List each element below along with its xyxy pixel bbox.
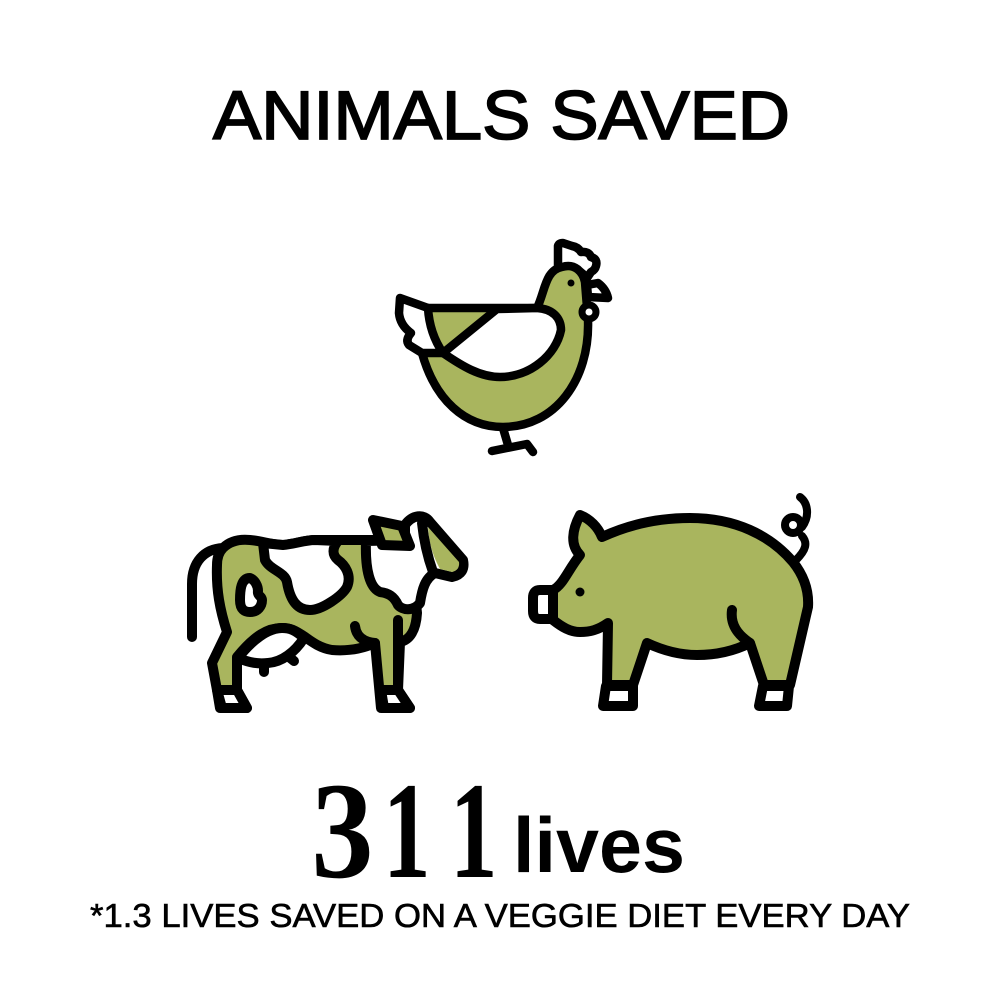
icon: pig — [533, 497, 808, 706]
cow head and neck patch — [366, 516, 464, 609]
pig snout — [533, 590, 553, 619]
pig tail loop — [785, 517, 801, 533]
cow teats — [264, 657, 294, 672]
cow udder — [238, 628, 304, 663]
chicken wattle — [582, 305, 596, 319]
cow leg lines — [355, 620, 398, 690]
title: ANIMALS SAVED — [213, 77, 790, 154]
chicken comb — [558, 243, 596, 278]
pig body — [553, 515, 808, 685]
pig front hoof — [603, 686, 633, 706]
cow tail — [192, 548, 223, 637]
cow spot — [240, 578, 262, 612]
icon: chicken — [399, 243, 608, 452]
cow face line — [422, 523, 433, 572]
chicken body — [422, 266, 588, 427]
chicken beak — [587, 283, 608, 298]
cow white middle patch — [263, 540, 349, 610]
footnote: *1.3 LIVES SAVED ON A VEGGIE DIET EVERY DAY — [90, 897, 910, 934]
lives number: 1 — [450, 754, 497, 907]
chicken leg — [492, 428, 533, 452]
chicken wing — [443, 308, 561, 377]
icon: cow — [192, 516, 464, 708]
chicken tail — [399, 298, 443, 353]
cow ear — [373, 520, 410, 546]
lives number — [311, 754, 497, 907]
cow body — [212, 540, 417, 708]
pig eye — [576, 588, 584, 596]
pig hind hoof — [759, 686, 789, 706]
cow face stripe — [428, 527, 459, 572]
lives number: 1 — [383, 754, 431, 907]
cow hooves — [217, 690, 247, 708]
chicken eye — [568, 280, 574, 286]
pig hind leg line — [732, 610, 750, 643]
lives label: lives — [513, 801, 685, 889]
pig tail — [796, 497, 807, 560]
lives number: 3 — [311, 755, 373, 907]
